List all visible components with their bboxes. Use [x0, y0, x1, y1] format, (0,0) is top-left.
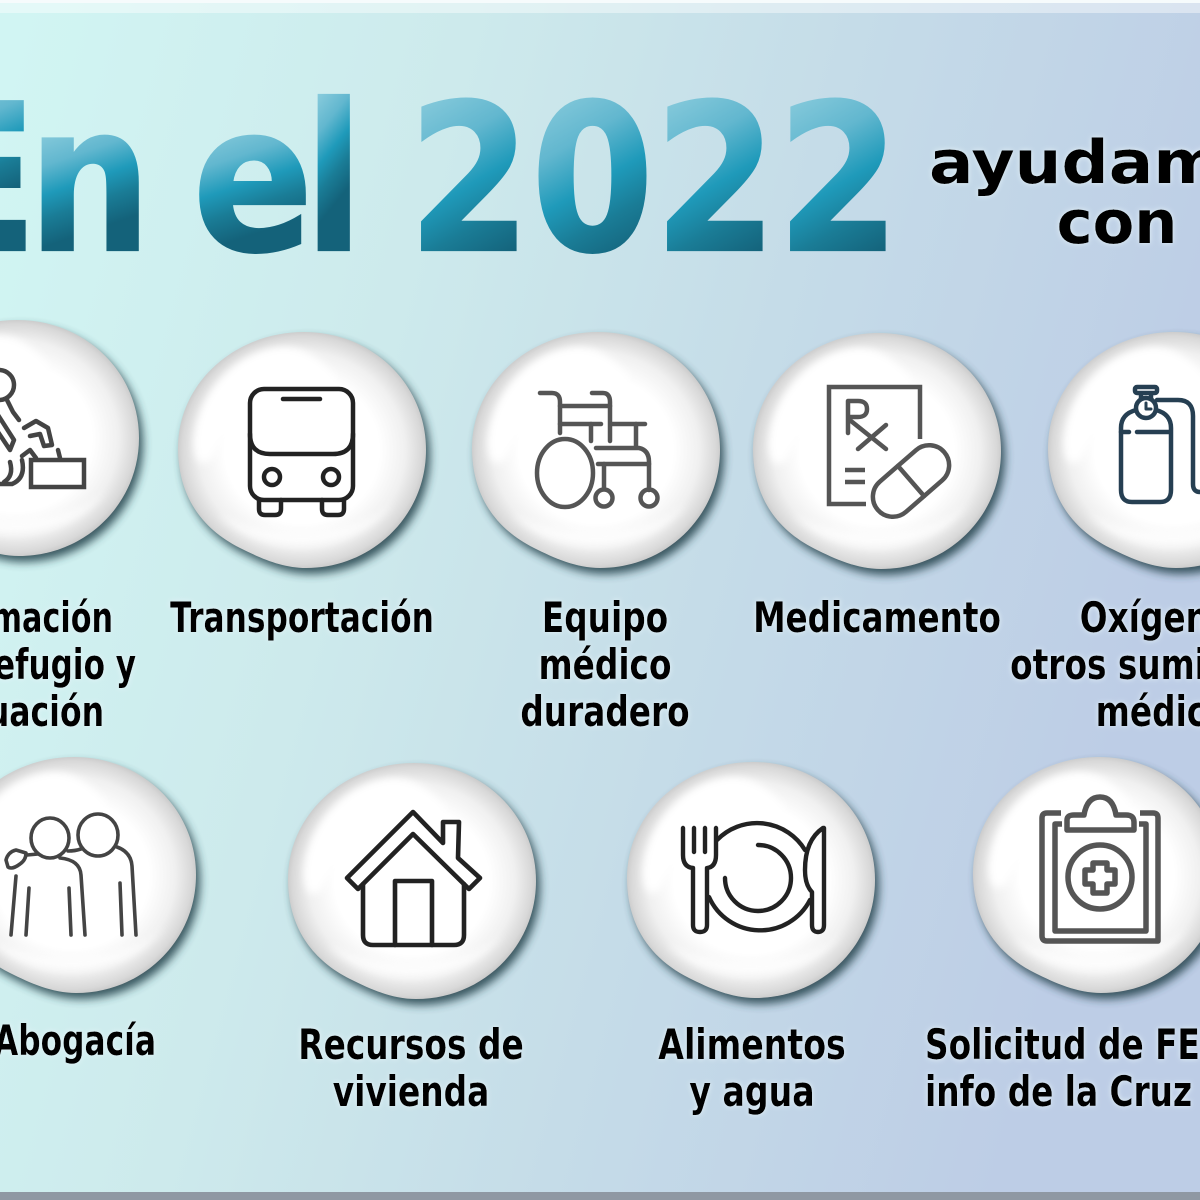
label: recursos de vivienda: Recursos de: [298, 1020, 524, 1069]
label: recursos de vivienda: vivienda: [333, 1067, 489, 1116]
sphere: vivienda: [288, 763, 540, 1005]
title: e: [192, 62, 314, 299]
label: información: [0, 593, 136, 736]
sphere: abogacía: [0, 757, 200, 999]
sphere: alimentos: [627, 762, 879, 1004]
panel: medicamento: [753, 333, 1005, 642]
panel: abogacía: [0, 757, 200, 1065]
icon: oxygen tank: [1121, 387, 1200, 502]
panel: solicitud de FEMA e info de la Cruz Roja: [925, 757, 1200, 1116]
label: equipo médico duradero: Equipo: [542, 593, 668, 642]
title: 2: [777, 62, 900, 299]
top band: [0, 0, 1200, 13]
panel: equipo médico duradero: [472, 332, 724, 736]
label: solicitud: [925, 1020, 1200, 1116]
label: alimentos y agua: y agua: [689, 1067, 815, 1116]
panel: oxígeno y otros suministros médicos: [1010, 332, 1200, 736]
title: n: [28, 62, 151, 299]
panel: información, refugio y evacuación: [0, 320, 143, 736]
title: l: [304, 62, 364, 299]
sphere: oxígeno: [1048, 332, 1200, 574]
bottom band: [0, 1192, 1200, 1200]
panel: transportación: [170, 332, 434, 642]
icon: house: [347, 812, 480, 945]
sphere: solicitud: [973, 757, 1200, 999]
icon: two people embracing: [6, 814, 136, 935]
panel: alimentos y agua: [627, 762, 879, 1116]
subtitle: [929, 127, 1200, 258]
label: equipo médico duradero: duradero: [520, 687, 690, 736]
sphere: transportación: [178, 332, 430, 574]
icon: prescription and pill: [829, 387, 957, 525]
icon: plate, fork and knife: [683, 823, 824, 932]
sphere: equipo médico: [472, 332, 724, 574]
subtitle: con: [1057, 188, 1177, 258]
label: recursos de vivienda: [298, 1020, 524, 1116]
label: transportación: Transportación: [170, 593, 434, 642]
icon: bus: [250, 389, 353, 515]
panel: recursos de vivienda: [288, 763, 540, 1116]
icon: person packing a box: [0, 370, 84, 487]
label: alimentos y agua: Alimentos: [658, 1020, 846, 1069]
title: 0: [531, 62, 654, 299]
title: [0, 62, 900, 299]
title: 2: [654, 62, 777, 299]
label: oxígeno y otros suministros: [1010, 593, 1200, 736]
sphere: información: [0, 320, 143, 562]
icon: medical clipboard: [1042, 797, 1158, 941]
title: 2: [408, 62, 531, 299]
sphere: medicamento: [753, 333, 1005, 575]
label: equipo médico duradero: [520, 593, 690, 736]
label: equipo médico duradero: médico: [539, 640, 671, 689]
label: alimentos y agua: [658, 1020, 846, 1116]
icon: wheelchair: [537, 393, 658, 507]
label: medicamento: Medicamento: [753, 593, 1001, 642]
